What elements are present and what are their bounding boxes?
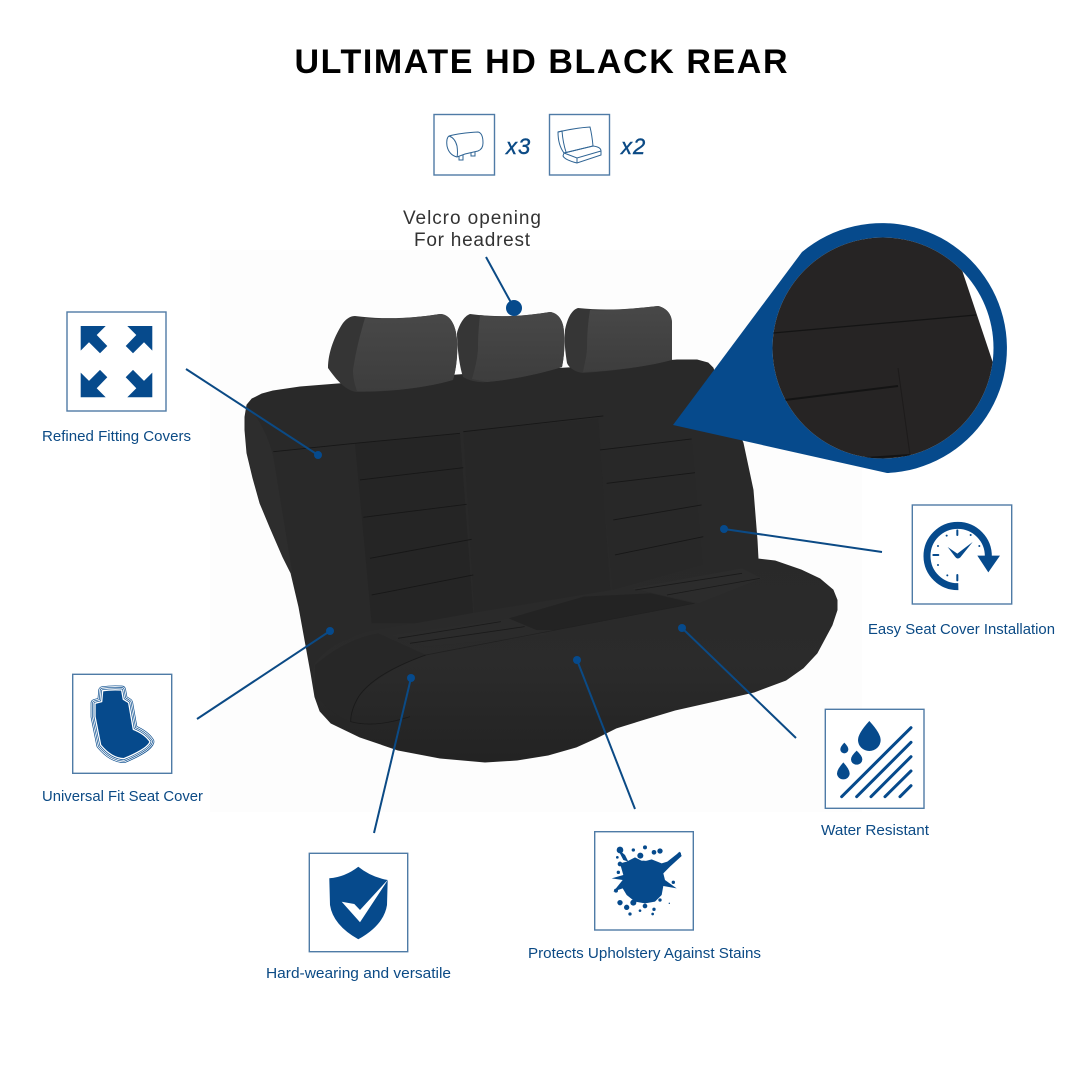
feature: protects upholstery against stains (528, 832, 761, 962)
feature: water resistant (821, 709, 929, 839)
leader lines (186, 257, 882, 833)
seat cover photo (245, 306, 840, 770)
caption: Refined Fitting Covers (42, 429, 191, 445)
magnifier: fabric close-up (673, 223, 1007, 473)
back panels and seams (274, 416, 704, 596)
leader: velcro opening (486, 257, 522, 316)
icon: shield with check (309, 853, 408, 952)
leader: stains (573, 656, 635, 809)
headrest right (565, 306, 672, 373)
icon: paint splat (595, 832, 693, 930)
caption: Protects Upholstery Against Stains (528, 946, 761, 962)
quantity x3: x3 (505, 134, 531, 159)
quantity icons (434, 114, 646, 175)
caption: Universal Fit Seat Cover (42, 789, 203, 805)
feature: hard-wearing and versatile (266, 853, 451, 982)
leader: hard-wearing (374, 674, 415, 833)
leader: universal fit (197, 627, 334, 719)
callout: velcro opening text: For headrest (414, 230, 531, 251)
headrest middle (457, 312, 564, 382)
seat body silhouette (245, 360, 837, 762)
title: ULTIMATE HD BLACK REAR (294, 43, 788, 81)
icon: headrest (434, 114, 494, 175)
icon: water drops and diagonal lines (825, 709, 924, 808)
icon: rear seat (550, 114, 610, 175)
feature: easy seat cover installation (868, 505, 1055, 638)
caption: Easy Seat Cover Installation (868, 622, 1055, 638)
lens white gap (772, 238, 994, 458)
lens fabric (772, 238, 992, 458)
quantity x2: x2 (620, 134, 646, 159)
cushion inserts and seams (350, 573, 760, 724)
icon: seat silhouette (73, 674, 172, 773)
feature: refined fitting covers (42, 312, 191, 445)
feature: universal fit seat cover (42, 674, 203, 805)
magnifier blue lens (673, 223, 1007, 473)
leader: water (678, 624, 796, 738)
icon: expand arrows (67, 312, 166, 411)
caption: Water Resistant (821, 823, 929, 839)
headrest left (328, 314, 457, 392)
caption: Hard-wearing and versatile (266, 966, 451, 982)
leader: refined fitting (186, 369, 322, 459)
callout: velcro opening text: Velcro opening (403, 208, 541, 229)
callout: velcro opening text (403, 208, 541, 251)
leader: easy installation (720, 525, 882, 552)
icon: clock with arrow (912, 505, 1012, 604)
seat cushion (300, 559, 840, 770)
photo background panel (210, 250, 862, 812)
